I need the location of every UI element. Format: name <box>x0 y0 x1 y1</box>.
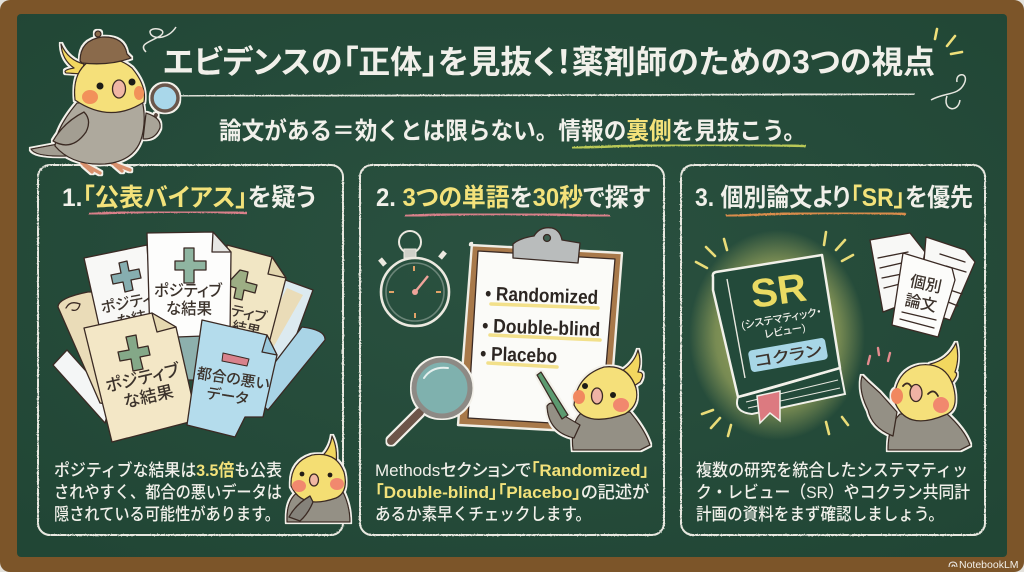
back right blue sheet <box>240 278 313 407</box>
hat <box>80 37 131 64</box>
panel 3 body text: 複数の研究を統合したシステマティッ <box>696 461 968 480</box>
cream paper right: 結果 <box>230 318 263 341</box>
feet <box>82 163 130 173</box>
highlight strokes <box>488 304 600 367</box>
magnifier <box>152 85 178 111</box>
title underline <box>180 94 915 96</box>
panel 2 body text: 「Double-blind」「Placebo」の記述が <box>375 482 649 502</box>
checklist words <box>480 283 601 368</box>
pointing cockatiel <box>861 343 970 450</box>
decorative swirl right <box>931 75 965 109</box>
body <box>55 100 144 164</box>
panel 2: three words <box>360 165 664 535</box>
magnifier handle <box>147 115 156 132</box>
panel 1: publication bias <box>38 165 350 535</box>
individual paper label: 論文 <box>903 291 938 316</box>
checklist words: • Placebo <box>480 343 558 368</box>
stopwatch <box>380 231 449 326</box>
wing holding magnifier <box>143 113 160 139</box>
panel 3 body text: 計画の資料をまず確認しましょう。 <box>696 505 944 524</box>
detective cockatiel with magnifier <box>31 31 178 173</box>
title: エビデンスの「正体」を見抜く！薬剤師のための3つの視点 <box>163 44 935 80</box>
white paper left: ポジティ <box>100 290 155 317</box>
cochrane tag <box>748 337 828 373</box>
panel 1 body text: ポジティブな結果は3.5倍も公表 <box>54 460 282 480</box>
SR book: レビュー) <box>763 321 806 341</box>
NotebookLM watermark: NotebookLM <box>959 559 1019 571</box>
panel 2 body text: Methodsセクションで「Randomized」 <box>375 461 649 480</box>
panel 2 heading: 2. 3つの単語を30秒で探す <box>376 184 650 212</box>
white paper centre <box>147 232 231 338</box>
cochrane tag: コクラン <box>753 341 824 371</box>
cream paper front <box>84 313 197 442</box>
checklist words: • Randomized <box>485 283 599 309</box>
panel 3: prioritise SR <box>681 165 985 535</box>
spark rays around book <box>696 232 853 436</box>
heading underline <box>726 213 906 216</box>
book subtitle: (システマティック・ <box>740 306 823 332</box>
white paper left <box>84 245 155 331</box>
white paper left: な結 <box>116 309 148 331</box>
tan scroll <box>58 292 130 408</box>
thinking cockatiel <box>287 436 350 522</box>
checklist words: • Double-blind <box>482 315 601 341</box>
pile of papers illustration <box>53 232 325 442</box>
tail <box>31 143 67 156</box>
individual paper label <box>903 272 943 316</box>
panel 2 body text <box>375 461 649 524</box>
clipboard <box>458 228 622 433</box>
blue paper unfavourable data: データ <box>205 384 250 409</box>
cream paper right: ティブ <box>229 301 270 327</box>
cream paper front: な結果 <box>122 382 175 412</box>
crest <box>61 44 84 74</box>
wing <box>53 112 89 145</box>
panel 3 heading: 3. 個別論文より「SR」を優先 <box>695 184 973 212</box>
panel 2 body text: あるか素早くチェックします。 <box>375 505 591 524</box>
panel 1 heading: 1.「公表バイアス」を疑う <box>62 184 316 212</box>
panel 3 body text: ク・レビュー（SR）やコクラン共同計 <box>696 483 970 502</box>
individual papers <box>870 233 975 337</box>
cockatiel with pencil <box>537 350 650 450</box>
decorative sparks top right <box>935 29 962 54</box>
blue paper unfavourable data <box>187 320 277 437</box>
decorative scribble top left <box>143 27 176 52</box>
panel 1 body text: されやすく、都合の悪いデータは <box>54 482 282 502</box>
sound marks <box>868 348 890 364</box>
SR book <box>713 255 845 423</box>
back white sheet <box>53 350 112 423</box>
panel 1 body text <box>54 460 282 524</box>
individual paper label: 個別 <box>908 272 943 297</box>
subtitle underline <box>572 145 806 148</box>
white paper centre: ポジティブ <box>154 281 223 300</box>
panel 1 body text: 隠されている可能性があります。 <box>54 504 280 524</box>
cheeks and face <box>82 90 98 104</box>
subtitle: 論文がある＝効くとは限らない。情報の裏側を見抜こう。 <box>219 117 806 145</box>
cream paper right <box>226 245 286 347</box>
cream paper front: ポジティブ <box>103 359 182 396</box>
magnifying glass <box>391 360 470 441</box>
blue paper unfavourable data: 都合の悪い <box>195 365 271 393</box>
SR title: SR <box>748 266 809 317</box>
book glow <box>689 230 865 440</box>
centre shadow sheet <box>140 325 250 380</box>
heading underline <box>405 214 610 216</box>
blue scroll <box>250 327 325 410</box>
panel 3 body text <box>696 461 970 524</box>
heading underline <box>89 212 247 214</box>
head <box>75 58 144 113</box>
white paper centre: な結果 <box>166 300 212 318</box>
